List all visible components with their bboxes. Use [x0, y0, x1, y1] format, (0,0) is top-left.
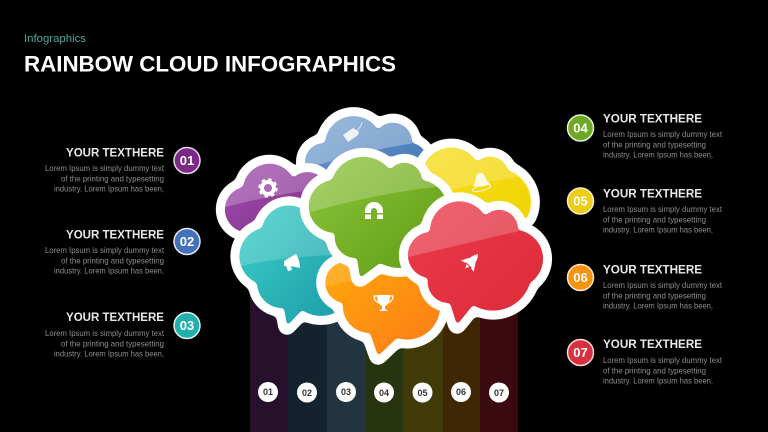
badge 05 [568, 188, 594, 214]
item 05: YOUR TEXTHERE [603, 186, 702, 200]
item 07: of the printing and typesetting [603, 366, 706, 376]
item 04 [568, 112, 723, 160]
item 05 [568, 186, 723, 234]
icon: gear [260, 180, 276, 196]
item 02: YOUR TEXTHERE [66, 228, 164, 242]
item 01 [45, 146, 200, 194]
item 03: Lorem Ipsum is simply dummy text [45, 328, 165, 338]
badge 07 [568, 340, 594, 366]
badge 04: 04 [573, 120, 588, 136]
item 03: of the printing and typesetting [61, 338, 164, 348]
item 06: industry. Lorem Ipsum has been, [603, 300, 713, 310]
cloud: red rocket [400, 195, 550, 325]
item 02: Lorem Ipsum is simply dummy text [45, 245, 165, 255]
icon: bell [472, 173, 491, 193]
badge 06 [568, 264, 594, 290]
item 06: YOUR TEXTHERE [603, 262, 702, 276]
item 01: YOUR TEXTHERE [66, 146, 164, 160]
item 04: Lorem Ipsum is simply dummy text [603, 129, 723, 139]
rainbow stripes with numbers [250, 285, 518, 432]
icon: tag [343, 122, 362, 142]
item 06: of the printing and typesetting [603, 290, 706, 300]
title: RAINBOW CLOUD INFOGRAPHICS [24, 52, 396, 76]
cloud: orange trophy [315, 250, 440, 356]
cloud: green magnet [300, 150, 448, 278]
badge 06: 06 [573, 270, 588, 285]
rainbow stripes with numbers: 07 [494, 388, 504, 398]
badge 02: 02 [180, 234, 194, 249]
icon: megaphone [284, 254, 300, 271]
rainbow stripes with numbers: 02 [302, 388, 312, 398]
item 03: industry. Lorem Ipsum has been, [54, 348, 164, 358]
item 05: Lorem Ipsum is simply dummy text [603, 204, 723, 214]
item 06: Lorem Ipsum is simply dummy text [603, 280, 723, 290]
item 05: of the printing and typesetting [603, 214, 706, 224]
item 04: industry. Lorem Ipsum has been, [603, 150, 713, 160]
badge 04 [568, 115, 594, 141]
item 01: of the printing and typesetting [61, 174, 164, 184]
item 03: YOUR TEXTHERE [66, 310, 164, 324]
rainbow stripes with numbers: 01 [263, 387, 273, 397]
badge 07: 07 [573, 345, 588, 360]
item 07: Lorem Ipsum is simply dummy text [603, 355, 723, 365]
cloud: blue tag [296, 107, 431, 170]
icon: rocket [459, 249, 484, 274]
eyebrow label: Infographics [24, 33, 87, 45]
rainbow stripes with numbers: 03 [341, 387, 351, 397]
item 02 [45, 228, 200, 276]
item 01: Lorem Ipsum is simply dummy text [45, 163, 165, 173]
item 02: industry. Lorem Ipsum has been, [54, 266, 164, 276]
badge 01: 01 [180, 153, 194, 168]
item 07: YOUR TEXTHERE [603, 337, 702, 351]
rainbow stripes with numbers: 04 [379, 388, 389, 398]
item 02: of the printing and typesetting [61, 256, 164, 266]
rainbow stripes with numbers: 05 [417, 388, 428, 398]
icon: trophy [374, 295, 393, 311]
item 06 [568, 262, 723, 310]
badge 01 [174, 148, 200, 174]
badge 05: 05 [573, 194, 588, 208]
item 01: industry. Lorem Ipsum has been, [54, 184, 164, 194]
item 03 [45, 310, 200, 358]
badge 03 [174, 312, 200, 338]
cloud: yellow bell [418, 138, 540, 226]
item 04: YOUR TEXTHERE [603, 112, 702, 126]
item 04: of the printing and typesetting [603, 140, 706, 150]
icon: magnet [365, 202, 383, 219]
badge 02 [174, 228, 200, 254]
cloud: purple gear [215, 150, 330, 240]
item 07: industry. Lorem Ipsum has been, [603, 376, 713, 386]
item 07 [568, 337, 723, 386]
item 05: industry. Lorem Ipsum has been, [603, 224, 713, 234]
cloud: teal megaphone [230, 190, 345, 326]
rainbow stripes with numbers: 06 [456, 387, 466, 397]
badge 03: 03 [180, 318, 194, 333]
